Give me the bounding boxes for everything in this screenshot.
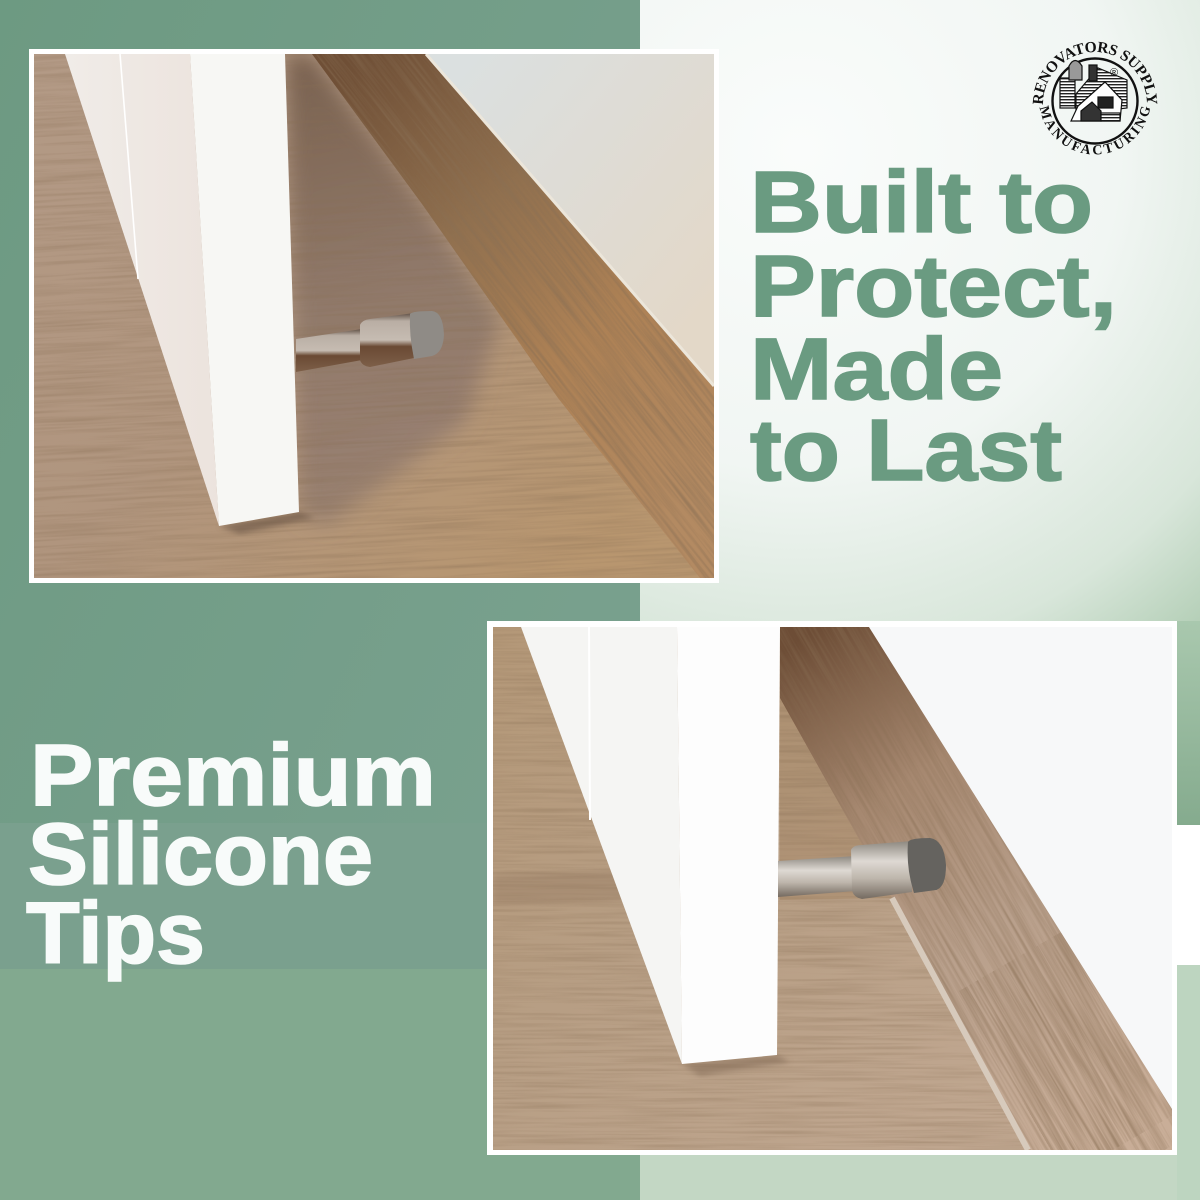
wall [869, 627, 1172, 1109]
heading: Built to Protect, Made to Last: to Last [750, 402, 1062, 499]
logo: Renovators Supply Manufacturing [1032, 42, 1158, 154]
door stopper [778, 838, 946, 899]
wall edge highlight [426, 54, 714, 386]
baseboard [780, 627, 1172, 1150]
heading: Premium Silicone Tips: Tips [26, 885, 205, 982]
wall [426, 54, 714, 386]
door front face [677, 627, 780, 1064]
door side face [65, 54, 219, 526]
logo house [1060, 60, 1127, 121]
heading: Built to Protect, Made to Last: Made [750, 321, 1003, 418]
door groove [120, 54, 138, 279]
door groove [589, 627, 590, 820]
logo registered mark: ® [1110, 67, 1118, 79]
heading: Built to Protect, Made to Last: Built to [750, 154, 1093, 251]
photo 2: door stop closer view, pale baseboard [487, 621, 1177, 1155]
door shadow at floor [219, 512, 315, 534]
door shadow at floor [682, 1055, 790, 1076]
photo 1: door stop on wooden floor, brown baseboard [29, 49, 719, 583]
logo arc text: RENOVATORS SUPPLY [1032, 42, 1158, 105]
logo arc text bottom: MANUFACTURING [1040, 105, 1150, 154]
baseboard [312, 54, 714, 578]
door side face [521, 627, 682, 1064]
heading: Premium Silicone Tips: Silicone [28, 806, 373, 903]
heading: Premium Silicone Tips: Premium [30, 727, 436, 824]
heading: Premium Silicone Tips [26, 727, 436, 982]
door stopper [296, 311, 444, 372]
heading: Built to Protect, Made to Last [750, 154, 1117, 499]
heading: Built to Protect, Made to Last: Protect, [750, 238, 1117, 335]
moulding strip [892, 898, 1028, 1150]
door front face [190, 54, 299, 526]
